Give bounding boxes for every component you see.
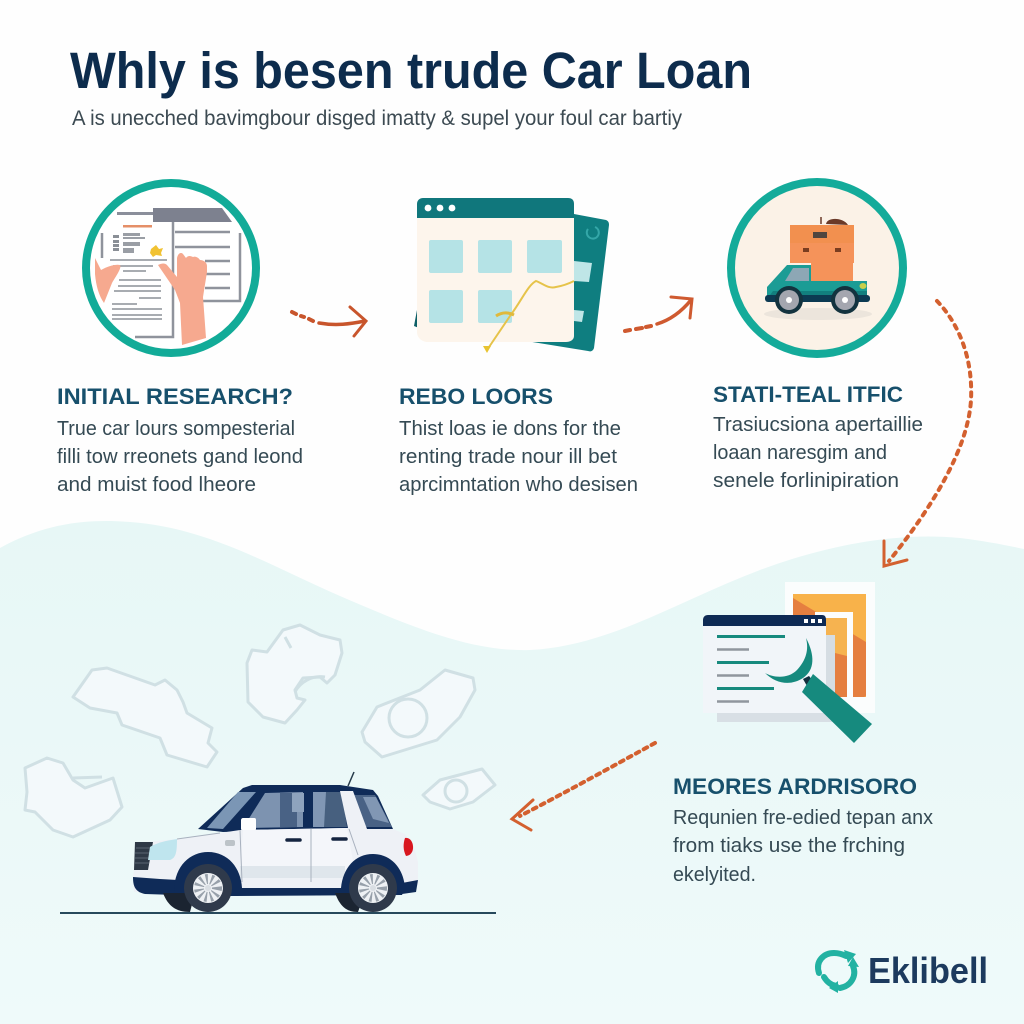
heading and text: stati-teal itfic: Trasiucsiona apertaillie: [713, 414, 923, 436]
faint map shapes: [25, 625, 495, 837]
subtitle: A is unecched bavimgbour disged imatty & supel your foul car bartiy: [72, 107, 682, 130]
ground line: [60, 912, 496, 914]
heading and text: rebo loors: REBO LOORS: [399, 384, 553, 409]
logo wordmark: Eklibell: [868, 950, 988, 991]
icon: car: [133, 772, 418, 912]
title: Whly is besen trude Car Loan: [70, 42, 752, 99]
heading and text: initial research: True car lours sompesterial: [57, 418, 295, 440]
logo: [818, 950, 988, 993]
heading and text: meores ardrisoro: ekelyited.: [673, 864, 756, 886]
heading and text: meores ardrisoro: Requnien fre-edied tepan anx: [673, 807, 933, 829]
icon: report with magnifier: [703, 582, 875, 743]
heading and text: meores ardrisoro: MEORES ARDRISORO: [673, 774, 917, 799]
arrow: step 2 to step 3: [625, 297, 692, 331]
heading and text: rebo loors: renting trade nour ill bet: [399, 446, 617, 468]
heading and text: stati-teal itfic: loaan naresgim and: [713, 442, 887, 464]
heading and text: initial research: [57, 384, 303, 496]
icon: browser window with chart: [414, 198, 609, 353]
heading and text: stati-teal itfic: [713, 382, 923, 492]
heading and text: initial research: and muist food lheore: [57, 474, 256, 496]
icon: research document in circle: [86, 183, 256, 353]
arrow: step 1 to step 2: [292, 307, 366, 336]
heading and text: initial research: INITIAL RESEARCH?: [57, 384, 293, 409]
background wave: [0, 521, 1024, 1024]
long dotted arrow: step 3 to step 4: [884, 301, 971, 566]
icon: truck with boxes in circle: [731, 182, 903, 354]
heading and text: meores ardrisoro: [673, 774, 933, 886]
long dotted arrow: step 4 to car: [512, 743, 655, 830]
heading and text: stati-teal itfic: STATI-TEAL ITFIC: [713, 382, 903, 407]
heading and text: rebo loors: [399, 384, 638, 496]
heading and text: initial research: filli tow rreonets gand leond: [57, 446, 303, 468]
logo mark: [818, 950, 859, 993]
heading and text: meores ardrisoro: from tiaks use the frching: [673, 835, 905, 857]
heading and text: rebo loors: aprcimntation who desisen: [399, 474, 638, 496]
heading and text: rebo loors: Thist loas ie dons for the: [399, 418, 621, 440]
heading and text: stati-teal itfic: senele forlinipiration: [713, 470, 899, 492]
